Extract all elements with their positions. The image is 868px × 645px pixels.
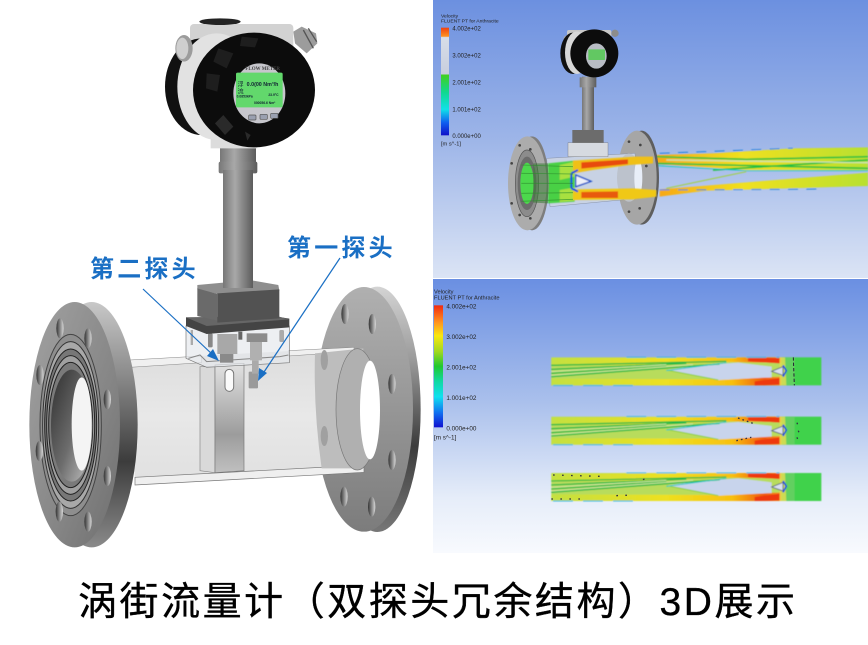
colour legend: [m s^-1] <box>434 434 457 441</box>
colour legend: 3.002e+02 <box>452 53 481 59</box>
colour legend: 0.000e+00 <box>452 134 481 140</box>
right flange <box>315 287 421 532</box>
LCD screen: 浮 <box>238 81 244 89</box>
LCD screen <box>236 67 283 107</box>
section view 1 <box>551 357 821 385</box>
sensor cylinders and bolts <box>191 330 284 374</box>
stem <box>223 170 253 285</box>
transmitter head <box>165 18 317 173</box>
panel: CFD velocity view with 3D meter <box>433 0 868 278</box>
rear housing <box>165 18 293 140</box>
section view 2 <box>551 417 821 445</box>
mini meter left flange <box>508 136 573 230</box>
LCD screen: 0.0(00 Nm³/h <box>247 82 278 88</box>
shedder slot <box>225 369 234 391</box>
stem lower part <box>223 270 253 288</box>
left plug <box>175 35 193 62</box>
LCD screen: FLOW METER <box>245 67 280 72</box>
right cable gland <box>293 27 317 53</box>
vortex shedder band <box>200 363 244 473</box>
panel: CFD velocity section views <box>433 279 868 553</box>
LCD screen: 000056.6 Nm³ <box>254 101 276 105</box>
front cover black ring <box>193 33 315 147</box>
mini meter right flange bore <box>617 154 642 202</box>
keypad buttons <box>249 113 278 120</box>
colour legend: 0.000e+00 <box>446 426 477 433</box>
first probe tip <box>249 372 258 388</box>
transmitter neck <box>211 130 257 173</box>
colour legend: 3.002e+02 <box>446 334 477 341</box>
transparent pipe body <box>130 347 364 485</box>
clear mounting box <box>186 326 289 367</box>
label: second probe: 第二探头 <box>90 256 199 283</box>
title: 涡街流量计（双探头冗余结构）3D展示 <box>78 581 795 624</box>
colour legend: Velocity <box>441 13 459 19</box>
colour legend: 1.001e+02 <box>446 395 477 402</box>
mini meter flow in pipe <box>548 157 656 203</box>
LCD screen: 0.0853kPa <box>237 95 253 99</box>
junction block <box>197 281 279 323</box>
display bezel <box>233 63 285 123</box>
mini meter pipe <box>547 153 638 207</box>
translucent right flange inner part <box>315 348 380 470</box>
colour legend: Velocity <box>434 289 454 295</box>
colour legend: 4.002e+02 <box>452 27 481 33</box>
colour legend: FLUENT PT for Anthracite <box>441 19 499 25</box>
LCD screen: 23.9°C <box>268 93 279 97</box>
colour legend: 4.002e+02 <box>446 303 477 310</box>
arrow: second probe <box>143 289 219 361</box>
section view 3 <box>551 473 821 501</box>
left flange <box>29 302 138 547</box>
colour legend: 2.001e+02 <box>452 80 481 86</box>
colour legend: [m s^-1] <box>441 142 461 148</box>
colour legend <box>441 13 499 148</box>
mini meter right flange <box>617 131 659 225</box>
colour legend <box>434 289 500 441</box>
LCD screen: 流 <box>238 87 244 95</box>
colour legend: 1.001e+02 <box>452 107 481 113</box>
colour legend: 2.001e+02 <box>446 365 477 372</box>
mini meter transmitter <box>560 29 619 77</box>
arrow: first probe <box>258 258 340 381</box>
panel: vortex flowmeter 3D model <box>29 18 421 547</box>
mounting plate <box>186 316 289 334</box>
mini meter stem and block <box>568 77 608 157</box>
label: first probe: 第一探头 <box>287 235 396 262</box>
CFD downstream streamlines <box>656 147 868 197</box>
colour legend: FLUENT PT for Anthracite <box>434 296 499 302</box>
